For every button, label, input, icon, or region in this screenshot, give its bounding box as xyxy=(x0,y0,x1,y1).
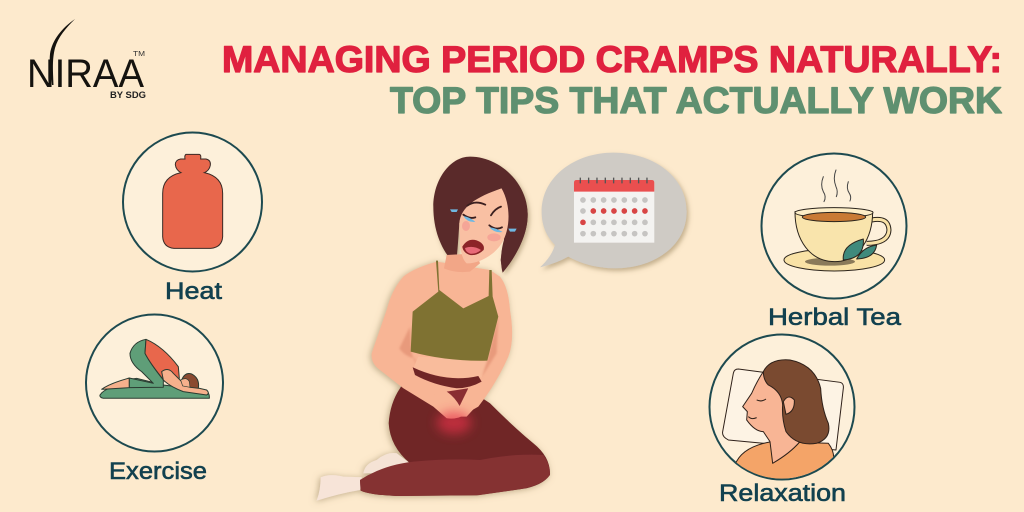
underwear triangle xyxy=(447,388,468,407)
title line 1: MANAGING PERIOD CRAMPS NATURALLY: xyxy=(222,39,1002,80)
midriff xyxy=(413,357,488,378)
calendar page xyxy=(574,182,654,243)
neck xyxy=(444,253,480,272)
cheeks xyxy=(462,221,470,231)
label: Relaxation xyxy=(719,480,846,507)
arm shadow right xyxy=(482,317,498,377)
logo xyxy=(27,19,146,101)
body xyxy=(317,261,550,501)
bubble shape xyxy=(540,153,687,268)
title xyxy=(222,39,1002,121)
calendar xyxy=(574,178,654,243)
back foot xyxy=(363,453,410,473)
circle xyxy=(86,314,223,452)
circle xyxy=(710,334,854,480)
speech bubble xyxy=(540,153,687,268)
label: Herbal Tea xyxy=(768,304,902,331)
title line 2: TOP TIPS THAT ACTUALLY WORK xyxy=(390,80,1002,121)
icon: sleeping woman xyxy=(723,360,843,482)
head xyxy=(433,157,528,273)
woman with cramps xyxy=(317,157,550,501)
hair right strip xyxy=(501,187,528,273)
front foot xyxy=(317,475,362,501)
tears xyxy=(450,209,517,232)
calendar dots xyxy=(580,197,648,236)
tip: exercise xyxy=(86,314,223,485)
mouth xyxy=(462,240,484,255)
tip: relaxation xyxy=(710,334,854,507)
calendar header xyxy=(574,180,654,192)
crop top xyxy=(411,261,498,361)
hair xyxy=(433,157,528,273)
logo wordmark: NIRAA xyxy=(27,52,144,96)
tip: herbal tea xyxy=(762,154,906,331)
brows and eyes xyxy=(463,203,502,229)
label: Heat xyxy=(165,278,222,305)
logo trademark: TM xyxy=(133,49,145,58)
icon: hot water bottle xyxy=(163,154,223,248)
pain glow xyxy=(437,411,471,434)
face xyxy=(459,188,509,263)
arm shadow left xyxy=(399,327,417,367)
waistband xyxy=(413,367,482,388)
logo leaf xyxy=(50,19,75,85)
icon: tea cup xyxy=(784,170,889,271)
circle xyxy=(762,154,906,298)
icon: child's pose figure xyxy=(100,339,209,398)
front leg xyxy=(360,455,550,496)
tip: heat xyxy=(123,132,262,305)
circle xyxy=(123,132,262,272)
calendar rings xyxy=(580,178,647,183)
hand fingers xyxy=(432,387,460,417)
label: Exercise xyxy=(109,458,207,485)
leggings xyxy=(360,367,550,496)
skin: arms and torso xyxy=(372,262,512,419)
logo tagline: BY SDG xyxy=(110,90,146,101)
